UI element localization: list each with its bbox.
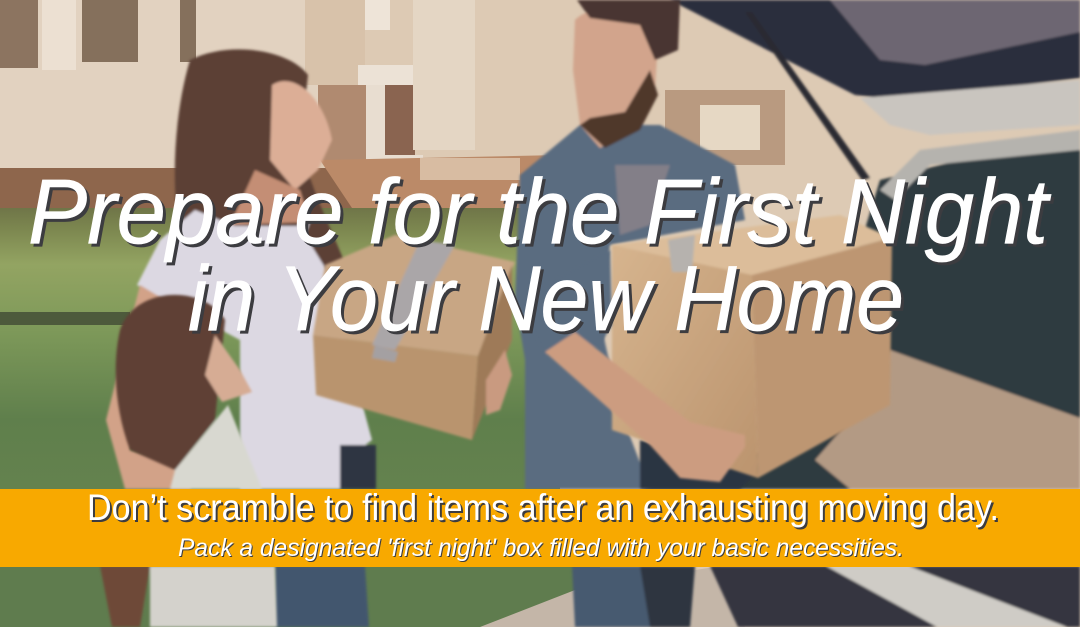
car [640,0,1080,627]
banner headline: Don’t scramble to find items after an exhausting moving day. [87,487,999,528]
title line 2: in Your New Home [188,248,904,350]
orange banner [0,487,1080,567]
title [28,161,1054,353]
man [515,0,760,627]
banner headline: Don’t scramble to find items after an exhausting moving day. [89,489,1001,530]
title line 1: Prepare for the First Night [31,164,1054,266]
small cardboard box [313,235,515,440]
title line 2: in Your New Home [191,251,907,353]
man's arm and hand over the box [520,250,745,482]
large cardboard box [612,215,892,478]
girl [100,295,277,627]
banner subheading: Pack a designated 'first night' box filled with your basic necessities. [178,534,904,562]
woman [106,49,376,627]
banner subheading: Pack a designated 'first night' box filled with your basic necessities. [179,535,905,563]
title line 1: Prepare for the First Night [28,161,1051,263]
